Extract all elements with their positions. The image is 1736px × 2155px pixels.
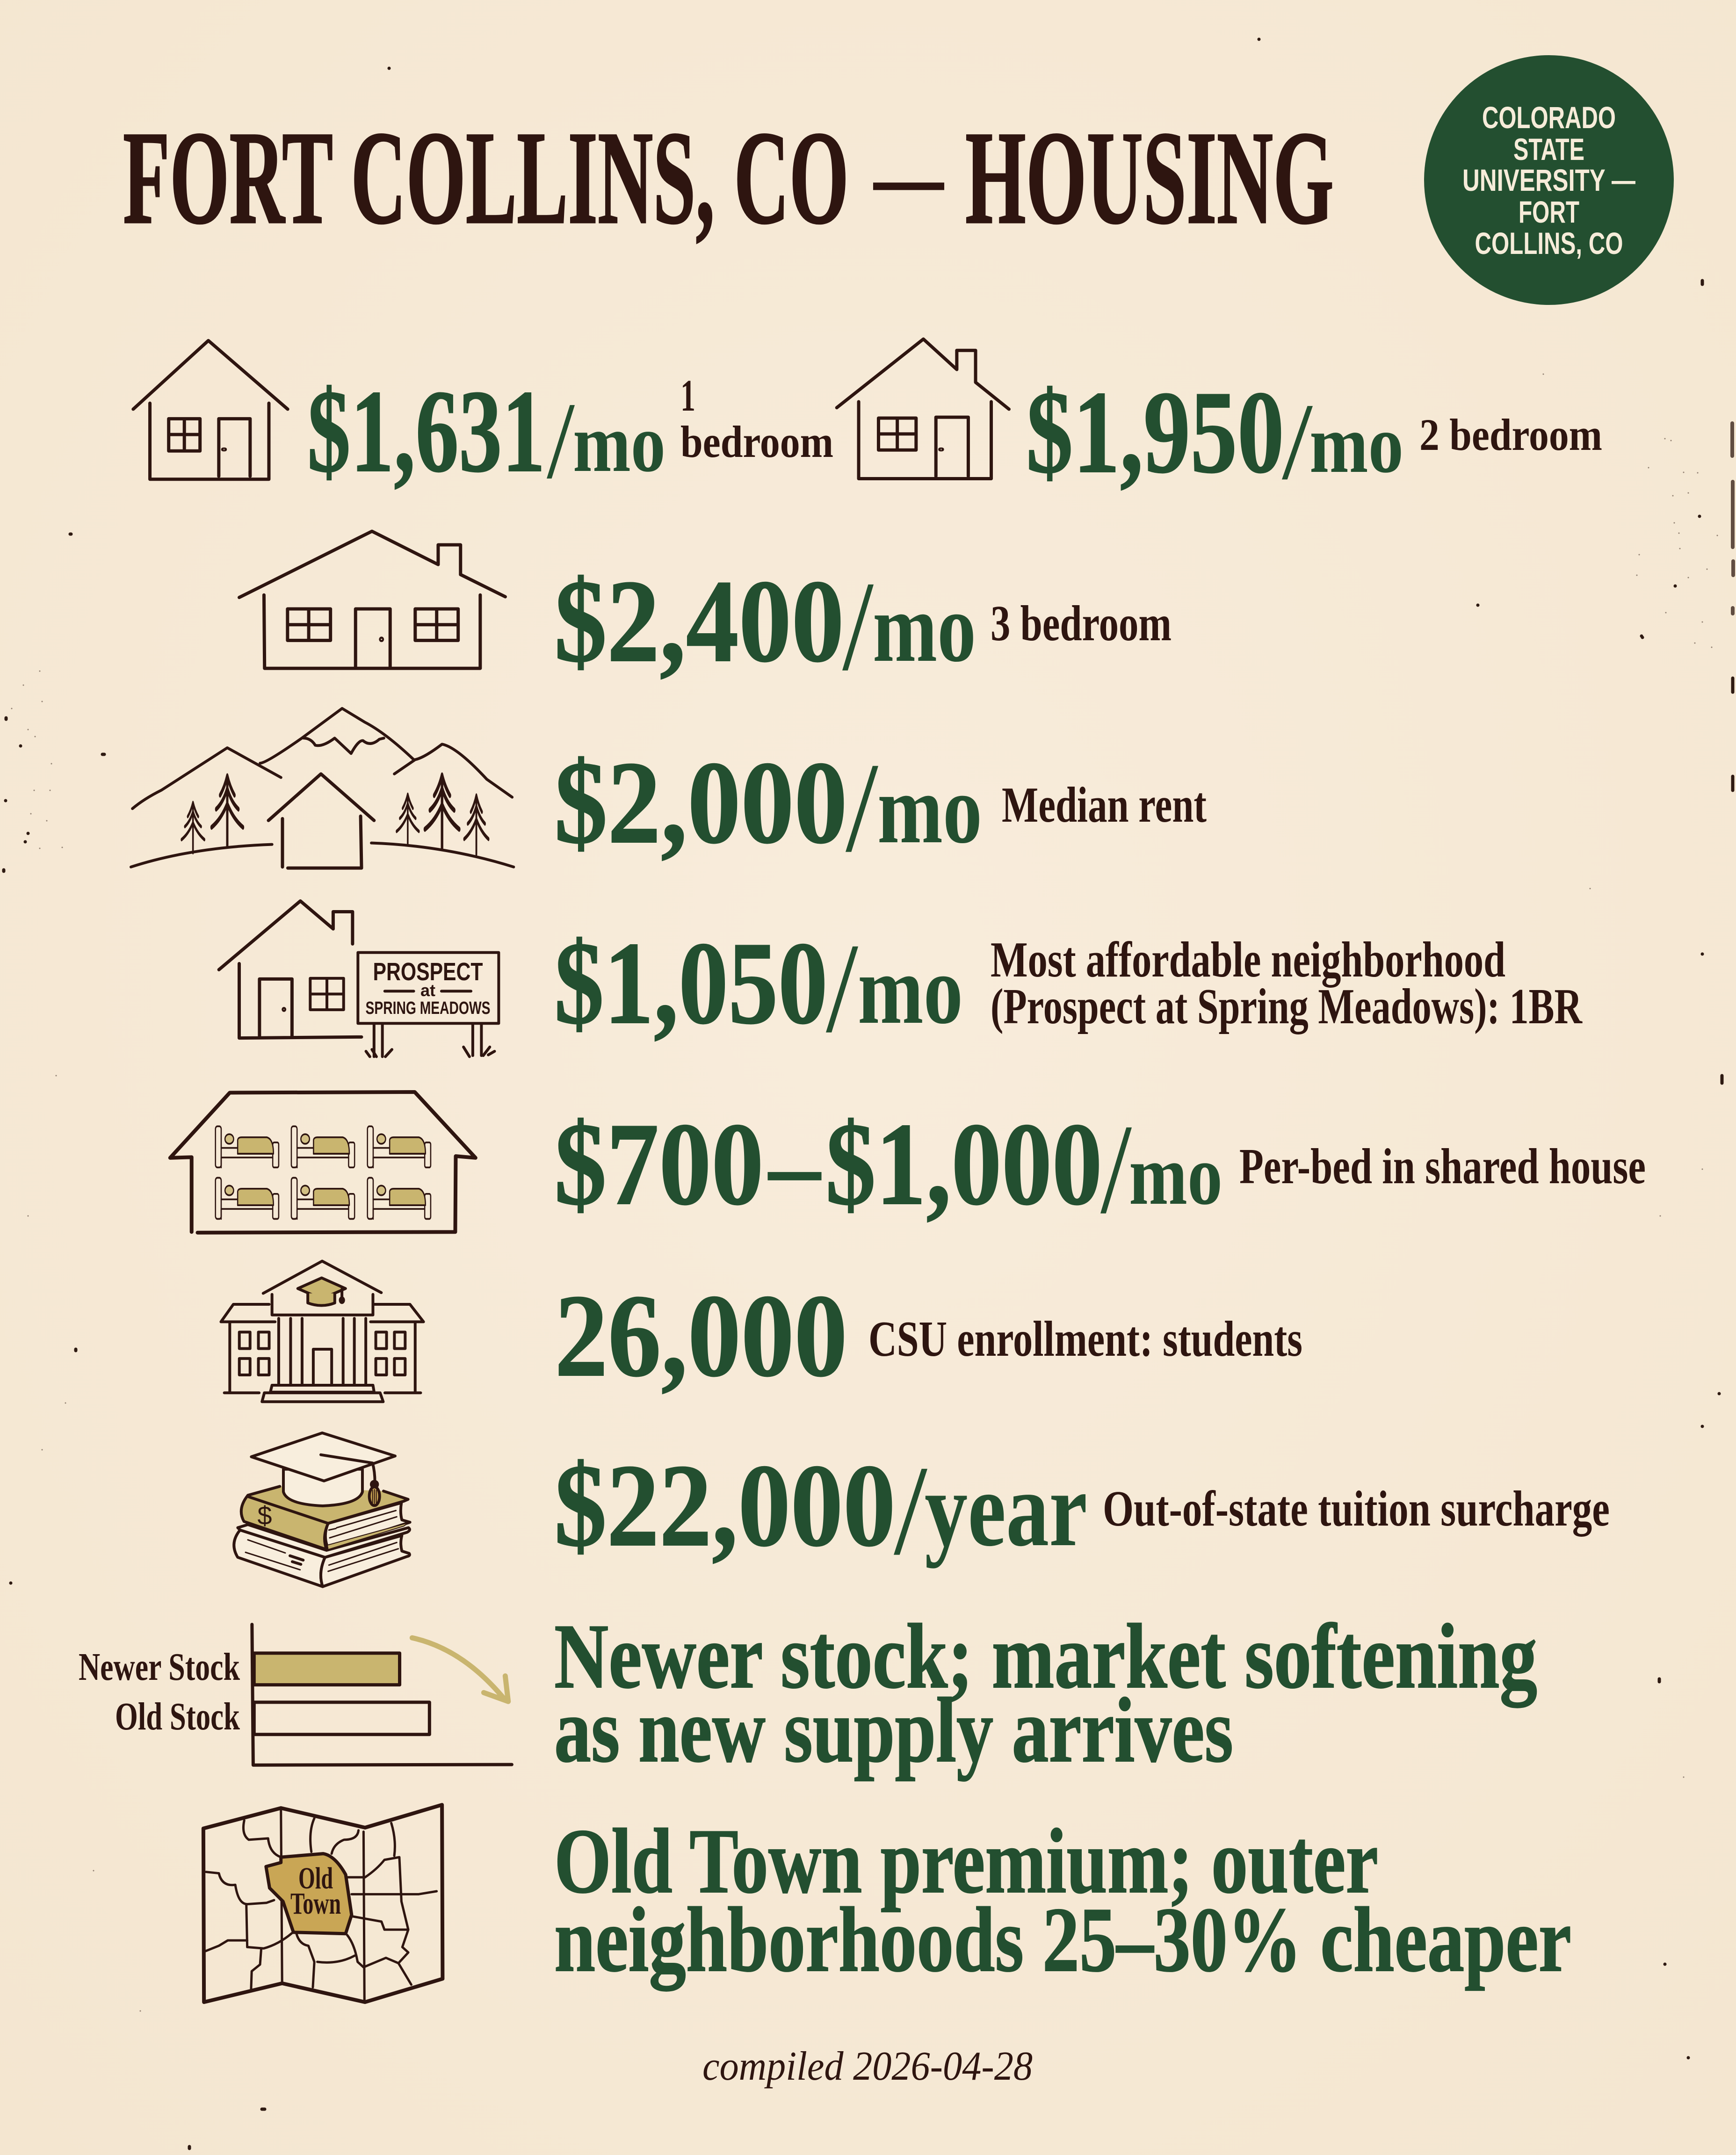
stat: 1 bedroom rent: bedroom [680, 417, 833, 467]
stat: 2 bedroom rent: 2 bedroom [1419, 410, 1602, 460]
stat: median rent: mo [877, 754, 982, 864]
stat: most affordable neighborhood: Most affordable neighborhood [991, 932, 1505, 988]
stat: CSU enrollment: CSU enrollment: students [868, 1311, 1302, 1367]
badge: Colorado State University [1424, 55, 1674, 305]
heading: newer stock market softening: Newer stock; market softening [554, 1605, 1537, 1708]
icon: map with Old Town highlighted: Old [298, 1861, 333, 1895]
stat: per-bed in shared house: $1,000 [825, 1099, 1102, 1229]
heading: Old Town premium: Old Town premium; outer [554, 1810, 1378, 1912]
stat: 3 bedroom rent: / [842, 555, 874, 697]
heading: Old Town premium [554, 1810, 1571, 1991]
title: — [873, 116, 944, 235]
icon: three-bedroom house [239, 531, 505, 668]
stat: per-bed in shared house: mo [1129, 1127, 1222, 1222]
stat: most affordable neighborhood: / [826, 917, 859, 1059]
chart: newer vs old stock bars with downward arrow [79, 1624, 512, 1765]
badge: Colorado State University: UNIVERSITY — [1462, 163, 1635, 197]
stat: 1 bedroom rent: 1 [680, 370, 695, 420]
icon: map with Old Town highlighted [203, 1805, 442, 2002]
icon: house with Prospect at Spring Meadows sign: SPRING MEADOWS [366, 998, 490, 1018]
stat: median rent: $2,000 [554, 737, 847, 868]
badge: Colorado State University: FORT [1519, 195, 1579, 229]
icon: house with Prospect at Spring Meadows sign [219, 901, 499, 1056]
stat: 3 bedroom rent: mo [873, 573, 976, 682]
stat: per-bed in shared house [554, 1098, 1646, 1240]
stat: 3 bedroom rent: $2,400 [554, 556, 844, 687]
stat: out-of-state tuition surcharge: year [925, 1449, 1087, 1569]
badge: Colorado State University: STATE [1513, 132, 1584, 166]
stat: most affordable neighborhood [554, 917, 1583, 1059]
icon: graduation cap on stacked books: $ [257, 1501, 272, 1530]
stat: CSU enrollment [555, 1270, 1302, 1401]
badge: Colorado State University: COLORADO [1482, 100, 1616, 135]
footer: compiled date: compiled 2026-04-28 [702, 2044, 1033, 2089]
icon: shared house with six beds [170, 1092, 476, 1233]
stat: median rent: / [846, 737, 879, 879]
stat: per-bed in shared house: / [1100, 1098, 1132, 1240]
title: FORT COLLINS, CO [123, 103, 849, 252]
heading: newer stock market softening [554, 1605, 1537, 1781]
stat: 1 bedroom rent: / [547, 380, 575, 501]
stat: most affordable neighborhood: mo [858, 935, 963, 1044]
title: HOUSING [965, 103, 1334, 252]
icon: university building [221, 1261, 424, 1402]
stat: 1 bedroom rent: mo [573, 397, 665, 489]
stat: 2 bedroom rent [1026, 367, 1602, 502]
stat: out-of-state tuition surcharge: $22,000 [554, 1440, 896, 1571]
stat: median rent [554, 737, 1207, 879]
icon: house with Prospect at Spring Meadows sign: PROSPECT [373, 958, 483, 986]
icon: two-bedroom house [837, 339, 1009, 479]
stat: 3 bedroom rent [554, 555, 1172, 697]
stat: 1 bedroom rent: $1,631 [307, 366, 545, 497]
icon: one-bedroom house [133, 340, 288, 479]
icon: house with Prospect at Spring Meadows sign: at [420, 981, 435, 1000]
stat: CSU enrollment: 26,000 [555, 1270, 847, 1401]
stat: most affordable neighborhood: $1,050 [554, 918, 828, 1049]
stat: out-of-state tuition surcharge: Out-of-state tuition surcharge [1103, 1481, 1610, 1537]
stat: out-of-state tuition surcharge [554, 1439, 1610, 1582]
icon: graduation cap on stacked books [234, 1433, 410, 1587]
chart: newer vs old stock bars with downward arrow: Old Stock [115, 1695, 240, 1738]
heading: newer stock market softening: as new supply arrives [554, 1679, 1233, 1781]
badge: Colorado State University: COLLINS, CO [1475, 226, 1623, 260]
icon: mountains, pine trees and house [131, 709, 514, 868]
stat: 2 bedroom rent: mo [1309, 398, 1403, 490]
stat: 3 bedroom rent: 3 bedroom [991, 596, 1172, 651]
stat: per-bed in shared house: – [767, 1099, 822, 1229]
stat: out-of-state tuition surcharge: / [894, 1439, 928, 1582]
stat: per-bed in shared house: $700 [554, 1099, 764, 1229]
icon: map with Old Town highlighted: Town [290, 1887, 341, 1921]
stat: 2 bedroom rent: $1,950 [1026, 367, 1284, 498]
stat: median rent: Median rent [1002, 777, 1207, 833]
stat: 2 bedroom rent: / [1282, 381, 1313, 502]
chart: newer vs old stock bars with downward arrow: Newer Stock [79, 1645, 240, 1689]
stat: 1 bedroom rent [307, 366, 833, 501]
